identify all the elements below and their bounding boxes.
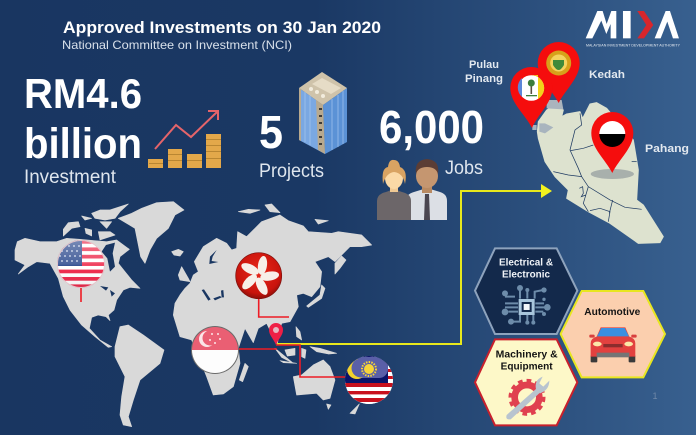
subtitle: National Committee on Investment (NCI): [62, 38, 292, 52]
panel: Machinery & Equipment: Equipment: [501, 362, 553, 373]
map: Peninsular Malaysia: [532, 100, 663, 243]
investment figure: Investment: [24, 167, 117, 188]
projects figure: [259, 106, 324, 182]
jobs figure: 6,000: [379, 101, 484, 153]
projects figure: Projects: [259, 161, 324, 182]
panel: Machinery & Equipment: [475, 339, 577, 425]
icon: coins and rising arrow: [148, 111, 221, 168]
projects figure: 5: [259, 106, 283, 158]
flag: Malaysia: [345, 356, 393, 404]
labels: states: Kedah: [589, 69, 625, 81]
investment figure: billion: [24, 120, 142, 168]
panel: Automotive: [561, 291, 665, 377]
icon: location pin: [269, 323, 283, 345]
callout lines: red connectors: [81, 288, 345, 377]
icon: two workers: [377, 159, 447, 220]
panel: Machinery & Equipment: Machinery &: [496, 350, 558, 361]
jobs figure: [379, 101, 484, 179]
panel: Electrical & Electronic: [475, 248, 577, 334]
flag: Hong Kong: [236, 253, 282, 299]
icon: office building: [299, 72, 347, 154]
labels: states: Pahang: [645, 143, 689, 155]
page number: 1: [652, 391, 658, 401]
icon: red car: [589, 327, 637, 362]
labels: states: Pinang: [465, 73, 503, 85]
icon: circuit chip: [502, 285, 551, 325]
pin: Kedah: [538, 42, 580, 103]
flag: United States: [57, 240, 105, 288]
panel: Electrical & Electronic: Electrical &: [499, 257, 553, 268]
flag: Singapore: [191, 326, 239, 374]
pin: Pahang: [591, 112, 633, 173]
labels: states: Pulau: [469, 59, 499, 71]
labels: states: [465, 59, 689, 155]
investment figure: RM4.6: [24, 70, 142, 117]
panel: Automotive: Automotive: [584, 307, 641, 318]
pin: Pulau Pinang: [510, 67, 552, 128]
logo: MIDA: MALAYSIAN INVESTMENT DEVELOPMENT AUTHORITY: [586, 44, 681, 48]
jobs figure: Jobs: [445, 158, 483, 179]
world map: [15, 202, 372, 427]
title: Approved Investments on 30 Jan 2020: [63, 18, 381, 37]
investment figure: [24, 70, 142, 188]
arrow: yellow connector: [277, 184, 552, 344]
logo: MIDA: [586, 11, 681, 47]
panel: Electrical & Electronic: Electronic: [502, 269, 550, 280]
icon: gear and wrench: [506, 377, 549, 419]
